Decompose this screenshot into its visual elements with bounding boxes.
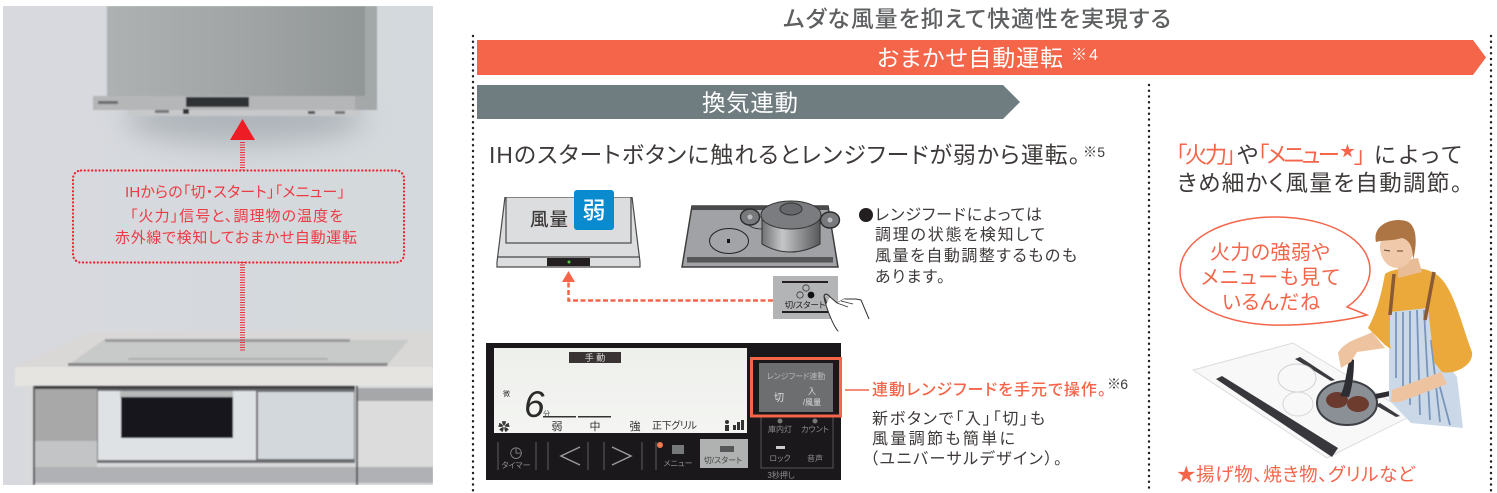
side buttons: ロック [769,454,791,463]
banner: linked ventilation: 換気連動 [702,90,798,116]
LCD screen: 分 [543,409,550,418]
banner: automatic operation [477,40,1486,75]
apron straps [1390,272,1434,320]
callout line [845,389,869,391]
heading: ムダな風量を抑えて快適性を実現する [783,6,1171,32]
text: manual operation [870,376,1128,468]
text: note on adaptive hoods: 風量を自動調整するものも [875,247,1077,265]
illustration: start button with hand [773,276,869,331]
control buttons: メニュー [663,459,693,468]
callout: sensor explanation: IHからの「切・スタート」「メニュー」 [125,184,345,201]
text: start button description: ※5 [1083,144,1105,160]
LCD screen: 6 [524,384,545,425]
speech bubble: メニューも見て [1201,267,1340,289]
text: automatic adjustment heading [1176,143,1462,196]
arrow: sensor signal [230,119,255,351]
panel: kitchen photo [3,6,433,485]
cooktop [1193,343,1413,458]
callout: sensor explanation: 「火力」信号と、調理物の温度を [130,208,343,225]
text: automatic adjustment heading: や [1237,143,1258,168]
LCD screen [494,348,747,434]
label: weak airflow: 弱 [582,197,606,223]
banner: linked ventilation [477,85,1020,119]
arrow: dashed signal to hood [562,271,773,300]
side buttons: カウント [801,425,829,434]
control buttons: タイマー [501,461,531,470]
text: note on adaptive hoods [859,207,1077,286]
dotted column dividers [473,36,1491,491]
text: manual operation: 新ボタンで「入」「切」も [872,410,1045,428]
arm and hands [1338,332,1385,368]
text: start button description: IHのスタートボタンに触れるとレンジフードが弱から運転。 [489,142,1080,168]
callout: sensor explanation: 赤外線で検知しておまかせ自動運転 [115,230,357,246]
speech bubble: 火力の強弱や [1210,241,1330,264]
text: manual operation: 連動レンジフードを手元で操作。 [872,381,1106,399]
text: note on adaptive hoods: あります。 [875,268,945,286]
panel: control display [486,343,841,480]
apron body [1389,308,1463,428]
illustration: man cooking at cooktop [1193,220,1472,458]
speech bubble: いるんだね [1222,292,1320,314]
side buttons: 3秒押し [767,470,795,480]
pot handles [740,209,840,228]
head [1375,220,1422,278]
LCD screen: ✿ [498,420,510,434]
illustration: range hood airflow [497,188,640,267]
text: automatic adjustment heading: 「火力」 [1176,143,1236,168]
LCD screen: 中 [590,420,600,433]
illustration: start button with hand: 切/スタート [785,300,826,310]
text: automatic adjustment heading: 」 [1354,143,1365,168]
illustration: range hood airflow: 風量 [530,209,568,230]
LCD screen: 強 [630,420,640,433]
text: note on adaptive hoods: 調理の状態を検知して [875,226,1045,244]
text: automatic adjustment heading: 「メニュー [1258,143,1340,168]
highlighted hood buttons: /風量 [803,398,821,407]
illustration: cooktop with pot [682,201,840,267]
shirt [1368,268,1472,373]
LCD screen: 微 [503,389,510,398]
side buttons [761,414,833,480]
range hood [93,6,377,116]
text: manual operation: 風量調節も簡単に [872,430,1015,448]
banner: automatic operation: おまかせ自動運転 [877,45,1063,71]
text: manual operation: ※6 [1107,376,1128,392]
control buttons [498,439,748,470]
highlighted hood buttons: レンジフード連動 [767,371,825,381]
LCD screen: 正下グリル [652,419,697,432]
frying pan [1317,358,1395,425]
highlighted hood buttons [752,358,840,416]
callout: sensor explanation [73,170,404,262]
LCD screen: 弱 [552,420,562,433]
text: automatic adjustment heading: によって [1374,143,1462,168]
speech bubble [1180,217,1370,325]
banner: automatic operation: ※4 [1071,47,1098,64]
LCD screen: 手 動 [585,352,605,363]
control buttons: ◷ [509,444,523,461]
control buttons: 切/スタート [704,456,742,465]
highlighted hood buttons: 入 [808,387,816,396]
countertop and cooktop [15,338,433,386]
footnote: ★揚げ物、焼き物、グリルなど [1177,464,1416,485]
highlighted hood buttons: 切 [774,392,784,404]
text: automatic adjustment heading: ★ [1340,143,1355,160]
side buttons: 庫内灯 [768,424,792,434]
label: weak airflow [574,190,614,230]
text: manual operation: （ユニバーサルデザイン）。 [870,449,1062,468]
text: note on adaptive hoods: レンジフードによっては [875,207,1042,224]
text: automatic adjustment heading: きめ細かく風量を自動調節。 [1177,171,1462,196]
side buttons: 音声 [807,453,823,463]
cabinet with grill [23,386,433,485]
